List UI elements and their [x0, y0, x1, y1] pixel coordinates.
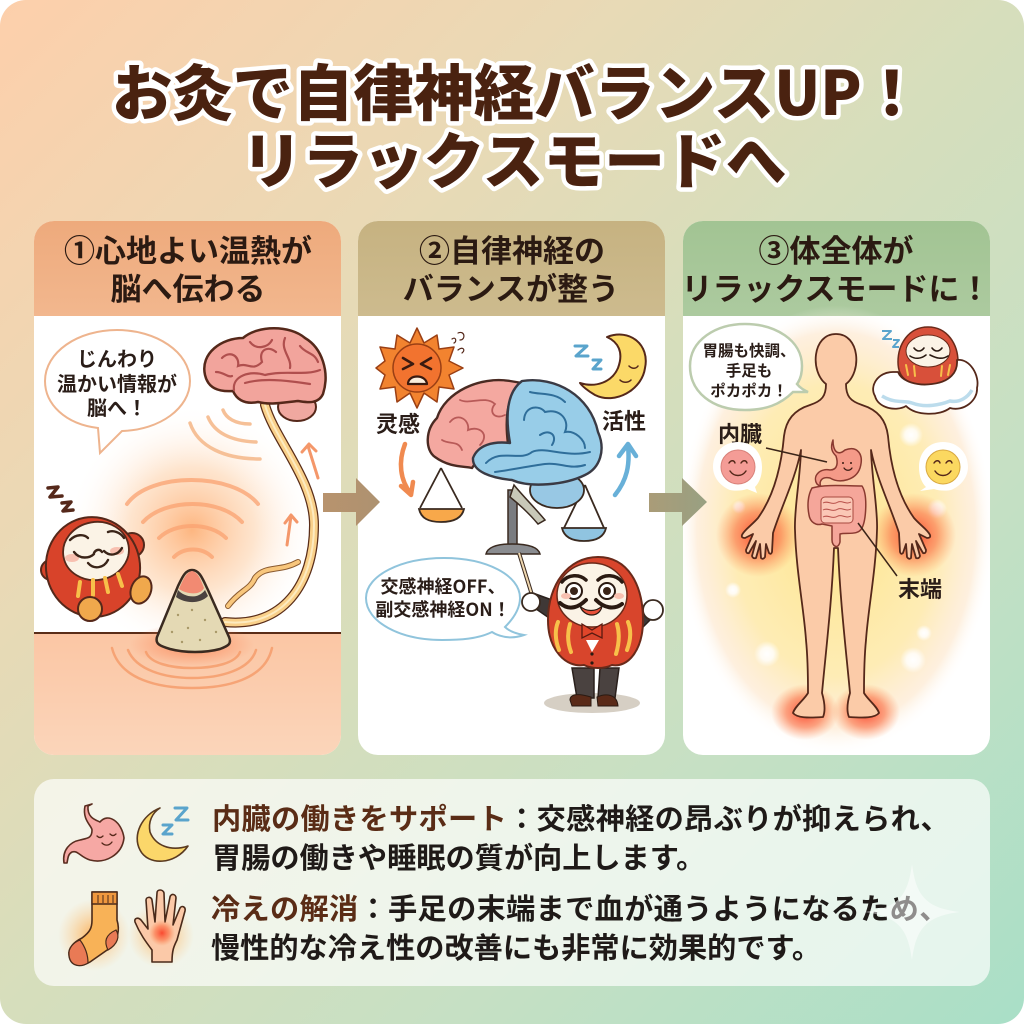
- panel: step 2 autonomic balance: [358, 221, 665, 755]
- text: relieving cold: 冷えの解消：手足の末端まで血が通うようになるため、: [211, 886, 949, 928]
- panel 1 heading: [34, 221, 341, 316]
- speech bubble: [45, 330, 190, 453]
- arrow down: [401, 444, 413, 495]
- warm glow: [94, 431, 292, 624]
- icon: daruma on cloud: [873, 327, 978, 414]
- decorative sparkle: [864, 864, 960, 960]
- speech bubble: じんわり: [77, 343, 157, 372]
- panel: step 1 warmth reaches the brain: [34, 221, 341, 755]
- title: リラックスモードへ: [242, 112, 786, 201]
- arrow up: [615, 444, 636, 495]
- panel 1 heading: 脳へ伝わる: [110, 264, 266, 309]
- speech bubble: 脳へ！: [87, 392, 147, 421]
- panel 2 heading: [358, 221, 665, 316]
- sparkles: [725, 423, 947, 673]
- icon: warm hand: [128, 890, 194, 968]
- panel 3 heading: リラックスモードに！: [681, 264, 991, 309]
- warm body glow: [678, 305, 994, 755]
- human body: [742, 334, 930, 718]
- panel: step 3 whole body relax: [678, 221, 994, 755]
- icon: moon with zzz: [137, 808, 188, 861]
- text: relieving cold: [211, 886, 949, 967]
- speech bubble: 手足も: [726, 359, 772, 381]
- heat waves toward brain: [190, 410, 260, 459]
- title: リラックスモードへ: [242, 112, 786, 201]
- label: 末端 with leader: 末端: [898, 572, 942, 604]
- icon: angry sun: [376, 328, 464, 408]
- arrow: step 1 to 2: [323, 478, 380, 526]
- text: organ support: 内臓の働きをサポート：交感神経の昂ぶりが抑えられ、: [212, 796, 950, 838]
- speech bubble: 胃腸も快調、: [702, 339, 796, 361]
- label: 活性: 活性: [602, 404, 646, 436]
- speech bubble: [366, 558, 524, 640]
- icon: warm sock: [58, 892, 130, 971]
- title: お灸で自律神経バランスUP！: [112, 44, 922, 133]
- heat waves from moxa: [127, 480, 258, 557]
- text: relieving cold: 慢性的な冷え性の改善にも非常に効果的です。: [211, 925, 821, 967]
- icon: sleeping daruma: [38, 487, 155, 624]
- stomach: [815, 440, 861, 488]
- intestines: [808, 486, 866, 546]
- text: organ support: 胃腸の働きや睡眠の質が向上します。: [212, 835, 705, 877]
- panel 2 heading: バランスが整う: [403, 264, 619, 309]
- speech bubble: 温かい情報が: [57, 368, 177, 397]
- speech bubble: [690, 324, 808, 410]
- label: 灵感: 灵感: [376, 407, 420, 439]
- two-colour brain: [428, 380, 602, 524]
- panel 1 heading: ①心地よい温熱が: [64, 226, 312, 271]
- speech bubble: ポカポカ！: [710, 379, 788, 401]
- moxa cone: [157, 570, 230, 652]
- speech bubble: 交感神経OFF、: [381, 573, 505, 599]
- up arrows along nerve: [285, 444, 318, 545]
- icon: stomach: [64, 804, 124, 863]
- red heat at hands and feet: [716, 493, 956, 740]
- nerve pathway: [225, 405, 314, 623]
- panel 3 heading: ③体全体が: [758, 226, 914, 271]
- icon: sleeping moon: [575, 335, 646, 398]
- label: 内臓 with leader: [720, 422, 828, 463]
- icon: pink smile: [713, 442, 762, 493]
- label: 末端 with leader: [858, 523, 942, 604]
- panel 2 heading: ②自律神経の: [419, 226, 605, 271]
- arrow: step 2 to 3: [649, 478, 707, 526]
- speech bubble: 副交感神経ON！: [375, 596, 511, 622]
- panel 3 heading: [681, 221, 991, 316]
- title: [112, 44, 922, 201]
- label: 内臓 with leader: 内臓: [718, 417, 762, 449]
- title: お灸で自律神経バランスUP！: [112, 44, 922, 133]
- icon: yellow smile: [919, 442, 968, 491]
- floor with heat rings: [34, 623, 341, 755]
- balance scale: [419, 468, 606, 554]
- icon: teacher daruma: [519, 553, 663, 713]
- panel: summary: [34, 779, 990, 986]
- brain: [204, 328, 326, 421]
- text: organ support: [212, 796, 950, 877]
